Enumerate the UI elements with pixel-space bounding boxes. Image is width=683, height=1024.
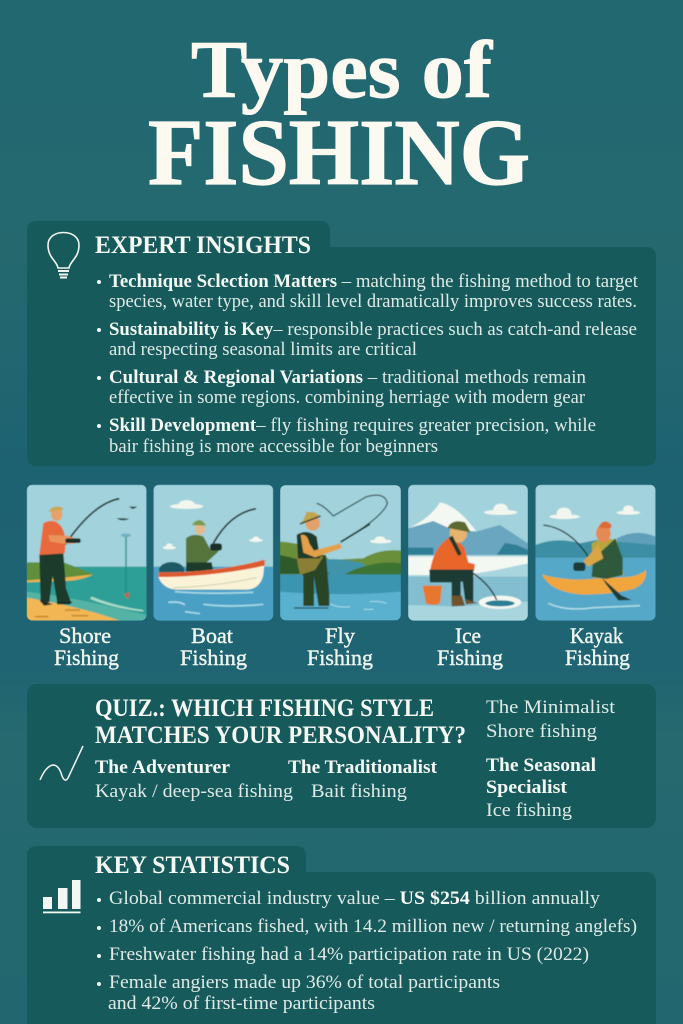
labels: fishing types: Fishing [180, 645, 247, 670]
panel: expert insights [27, 221, 656, 466]
statistics list [97, 888, 637, 1014]
insights list: Cultural & Regional Variations – traditional methods remain [109, 367, 586, 388]
title [148, 24, 530, 205]
labels: fishing types: Shore [59, 623, 111, 648]
quiz: seasonal specialist [486, 755, 596, 821]
labels: fishing types: Boat [191, 623, 233, 648]
illustration: kayak fishing [535, 485, 656, 621]
title: Types of [191, 24, 494, 115]
insights list: Technique Sclection Matters – matching the fishing method to target [109, 271, 639, 292]
labels: fishing types: Fishing [565, 645, 630, 670]
quiz: traditionalist: Bait fishing [311, 781, 408, 802]
insights list: species, water type, and skill level dramatically improves success rates. [109, 291, 637, 312]
illustration: shore fishing [27, 485, 147, 622]
insights list: bair fishing is more accessible for beginners [109, 436, 438, 457]
quiz: minimalist [486, 697, 616, 742]
statistics list: Freshwater fishing had a 14% participation rate in US (2022) [109, 944, 589, 965]
labels: fishing types: Fishing [54, 645, 119, 670]
quiz: adventurer [95, 757, 294, 802]
heading: quiz: QUIZ.: WHICH FISHING STYLE [95, 695, 434, 722]
labels: fishing types [54, 623, 630, 670]
illustration: ice fishing [408, 485, 528, 622]
insights list: and respecting seasonal limits are critical [109, 339, 417, 360]
insights list: effective in some regions. combining herriage with modern gear [109, 387, 586, 408]
statistics list: 18% of Americans fished, with 14.2 million new / returning anglefs) [109, 916, 637, 937]
quiz: minimalist: The Minimalist [486, 697, 616, 718]
insights list [97, 271, 639, 457]
statistics list: Global commercial industry value – US $254 billion annually [109, 888, 601, 909]
statistics list: Female angiers made up 36% of total participants [109, 972, 500, 993]
illustration: boat fishing [153, 485, 273, 622]
labels: fishing types: Fly [325, 623, 355, 648]
quiz: traditionalist [288, 757, 438, 802]
panel: quiz [27, 684, 656, 828]
labels: fishing types: Kayak [570, 623, 623, 648]
labels: fishing types: Fishing [437, 645, 503, 670]
title: FISHING [148, 101, 530, 205]
icon: bar chart [43, 880, 80, 913]
quiz: seasonal specialist: Ice fishing [486, 800, 573, 821]
icon: trend line [40, 746, 83, 780]
quiz: adventurer: The Adventurer [95, 757, 231, 778]
heading: key statistics: KEY STATISTICS [95, 852, 290, 879]
quiz: seasonal specialist: Specialist [486, 777, 568, 798]
heading: quiz: MATCHES YOUR PERSONALITY? [95, 722, 466, 749]
statistics list: and 42% of first-time participants [108, 993, 375, 1014]
insights list: Sustainability is Key– responsible practices such as catch-and release [109, 319, 637, 340]
quiz: adventurer: Kayak / deep-sea fishing [95, 781, 294, 802]
icon: light bulb [48, 232, 79, 278]
heading: expert insights: EXPERT INSIGHTS [95, 232, 311, 259]
insights list: Skill Development– fly fishing requires greater precision, while [109, 415, 596, 436]
quiz: traditionalist: The Traditionalist [288, 757, 438, 778]
labels: fishing types: Ice [455, 623, 481, 648]
quiz: seasonal specialist: The Seasonal [486, 755, 596, 776]
heading: quiz [95, 695, 466, 749]
labels: fishing types: Fishing [307, 645, 373, 670]
quiz: minimalist: Shore fishing [486, 721, 598, 742]
illustration: fly fishing [280, 485, 401, 621]
panel: key statistics [27, 846, 656, 1024]
